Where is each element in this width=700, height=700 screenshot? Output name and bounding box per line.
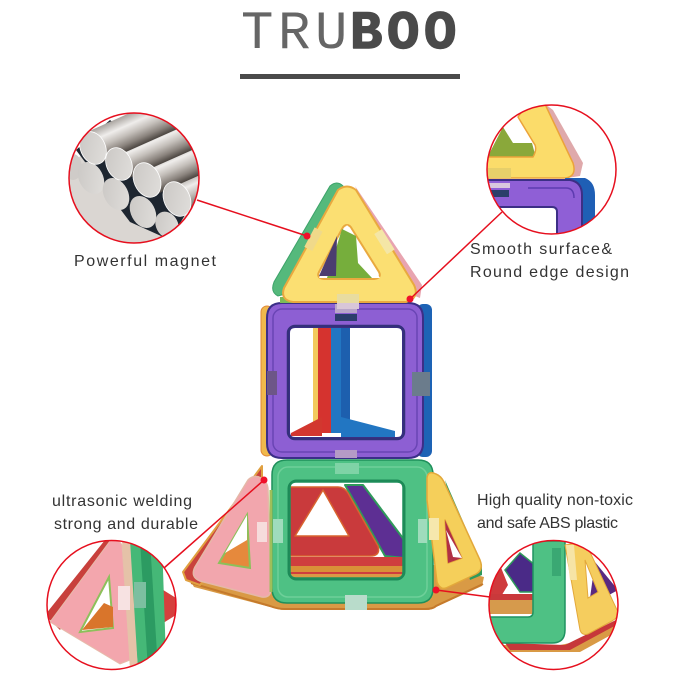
label: ultrasonic welding strong and durable: strong and durable [54, 516, 198, 533]
label: ultrasonic welding strong and durable [52, 493, 198, 533]
yellow triangle block right [427, 473, 482, 588]
title: TRUBOO logo: TRU [241, 4, 347, 65]
panel: smooth surface zoom circle [485, 100, 617, 240]
toy tower [183, 183, 484, 610]
title underline [240, 74, 460, 79]
purple square block [267, 303, 430, 458]
label: high quality non-toxic and safe ABS plastic [477, 492, 633, 532]
yellow triangle block top [283, 186, 416, 309]
inner red triangle [280, 487, 379, 556]
label: smooth surface and round edge design [470, 241, 629, 281]
inner purple and green band [345, 485, 405, 558]
callout line: smooth surface [406, 212, 502, 302]
label: ultrasonic welding strong and durable: ultrasonic welding [52, 493, 192, 510]
callout line: ABS plastic [432, 586, 490, 597]
red triangle behind left [183, 466, 262, 585]
label: smooth surface and round edge design: Round edge design [470, 264, 629, 281]
green and pink triangles behind top [273, 183, 422, 303]
inner red bar [280, 557, 415, 574]
base plate [190, 565, 484, 610]
back blocks through purple square [261, 304, 432, 457]
label: smooth surface and round edge design: Smooth surface& [470, 241, 612, 258]
pink triangle block [193, 476, 271, 597]
callout line: magnet [197, 200, 310, 240]
panel: ultrasonic welding zoom circle [45, 540, 177, 670]
label: high quality non-toxic and safe ABS plastic: High quality non-toxic [477, 492, 633, 509]
panel: magnet zoom circle [68, 112, 200, 244]
title: TRUBOO logo [241, 4, 456, 65]
green square block [272, 460, 433, 610]
title: TRUBOO logo: BOO [350, 4, 456, 65]
label: powerful magnet: Powerful magnet [74, 253, 217, 270]
callout line: ultrasonic welding [164, 476, 268, 568]
label: high quality non-toxic and safe ABS plastic: and safe ABS plastic [477, 515, 618, 532]
panel: ABS plastic zoom circle [485, 540, 620, 671]
